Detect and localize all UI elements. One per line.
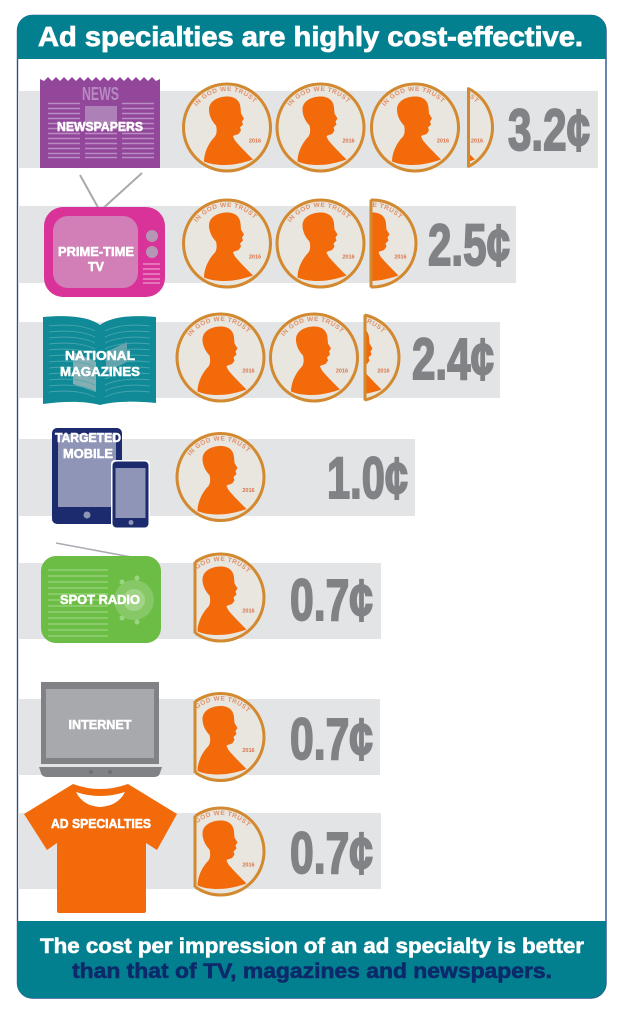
icon: newspaper [40, 77, 160, 168]
partial penny: IN GOD WE TRUST [196, 696, 251, 712]
penny: IN GOD WE TRUST [194, 86, 258, 106]
partial penny: IN GOD WE TRUST [372, 202, 403, 218]
icon: newspaper: NEWSPAPERS [57, 120, 143, 134]
bar [18, 91, 598, 168]
value: 0.7¢ [290, 821, 373, 886]
penny [370, 82, 460, 172]
footer line one: The cost per impression of an ad specialty is better [40, 935, 584, 958]
row: spot radio [18, 542, 381, 643]
bar [18, 699, 380, 775]
partial penny [364, 314, 400, 402]
icon: newspaper: NEWS [82, 84, 119, 104]
penny: 2016 [242, 368, 255, 374]
icon: magazine [43, 316, 156, 405]
row: targeted mobile [18, 428, 415, 528]
penny: IN GOD WE TRUST [280, 316, 344, 336]
partial penny: 2016 [377, 368, 390, 374]
penny: 2016 [342, 254, 355, 260]
row: prime-time tv [18, 172, 516, 297]
penny: 2016 [249, 254, 261, 260]
value: 2.5¢ [428, 213, 510, 278]
penny: IN GOD WE TRUST [287, 86, 351, 106]
partial penny: 2016 [394, 254, 407, 260]
header band [17, 15, 606, 59]
icon: radio: SPOT RADIO [60, 593, 140, 607]
partial penny [194, 552, 266, 642]
value: 1.0¢ [327, 446, 408, 511]
bar [18, 813, 381, 889]
row: ad specialties [18, 784, 381, 913]
icon: t-shirt: AD SPECIALTIES [51, 817, 151, 831]
penny [269, 312, 359, 402]
icon: tablet and phone: TARGETED [55, 431, 121, 445]
partial penny: 2016 [242, 608, 255, 614]
penny: 2016 [437, 138, 449, 144]
bar [18, 322, 500, 398]
partial penny: IN GOD WE TRUST [196, 810, 251, 826]
penny: 2016 [342, 138, 355, 144]
penny [276, 82, 366, 172]
partial penny: IN GOD WE TRUST [366, 318, 386, 332]
penny: IN GOD WE TRUST [194, 202, 258, 222]
title: Ad specialties are highly cost-effective. [38, 21, 583, 52]
bar [18, 206, 516, 283]
partial penny: IN GOD WE TRUST [470, 92, 480, 102]
icon: television: TV [88, 260, 105, 274]
partial penny [370, 198, 418, 288]
penny [276, 198, 366, 288]
partial penny [194, 692, 266, 782]
value: 3.2¢ [508, 98, 590, 163]
icon: laptop [39, 682, 162, 777]
icon: t-shirt [24, 784, 177, 913]
row: newspapers [18, 77, 598, 172]
value: 0.7¢ [290, 568, 373, 633]
icon: laptop: INTERNET [68, 718, 132, 732]
footer line two: than that of TV, magazines and newspapers. [72, 960, 552, 983]
bar [18, 439, 415, 516]
icon: radio [41, 543, 161, 643]
value: 2.4¢ [412, 327, 494, 392]
penny: 2016 [336, 368, 348, 374]
icon: magazine: NATIONAL [65, 349, 135, 363]
penny: 2016 [249, 138, 261, 144]
icon: tablet and phone: MOBILE [63, 447, 113, 461]
partial penny [194, 806, 266, 896]
partial penny: 2016 [242, 748, 255, 754]
row: national magazines [18, 312, 500, 405]
partial penny: 2016 [471, 138, 483, 144]
penny [182, 198, 272, 288]
row: internet [18, 682, 380, 782]
icon: tablet and phone [52, 428, 150, 529]
icon: television: PRIME-TIME [58, 245, 134, 259]
penny: 2016 [242, 488, 255, 494]
penny: IN GOD WE TRUST [382, 86, 446, 106]
icon: television [44, 173, 165, 297]
penny: IN GOD WE TRUST [187, 436, 251, 456]
partial penny: IN GOD WE TRUST [196, 556, 251, 572]
partial penny [467, 87, 494, 168]
penny: IN GOD WE TRUST [187, 316, 251, 336]
icon: magazine: MAGAZINES [60, 365, 140, 379]
bar [18, 563, 381, 639]
penny [176, 432, 266, 522]
footer band [17, 921, 606, 998]
penny [176, 312, 266, 402]
value: 0.7¢ [290, 707, 373, 772]
partial penny: 2016 [242, 862, 255, 868]
penny [182, 82, 272, 172]
penny: IN GOD WE TRUST [287, 202, 351, 222]
